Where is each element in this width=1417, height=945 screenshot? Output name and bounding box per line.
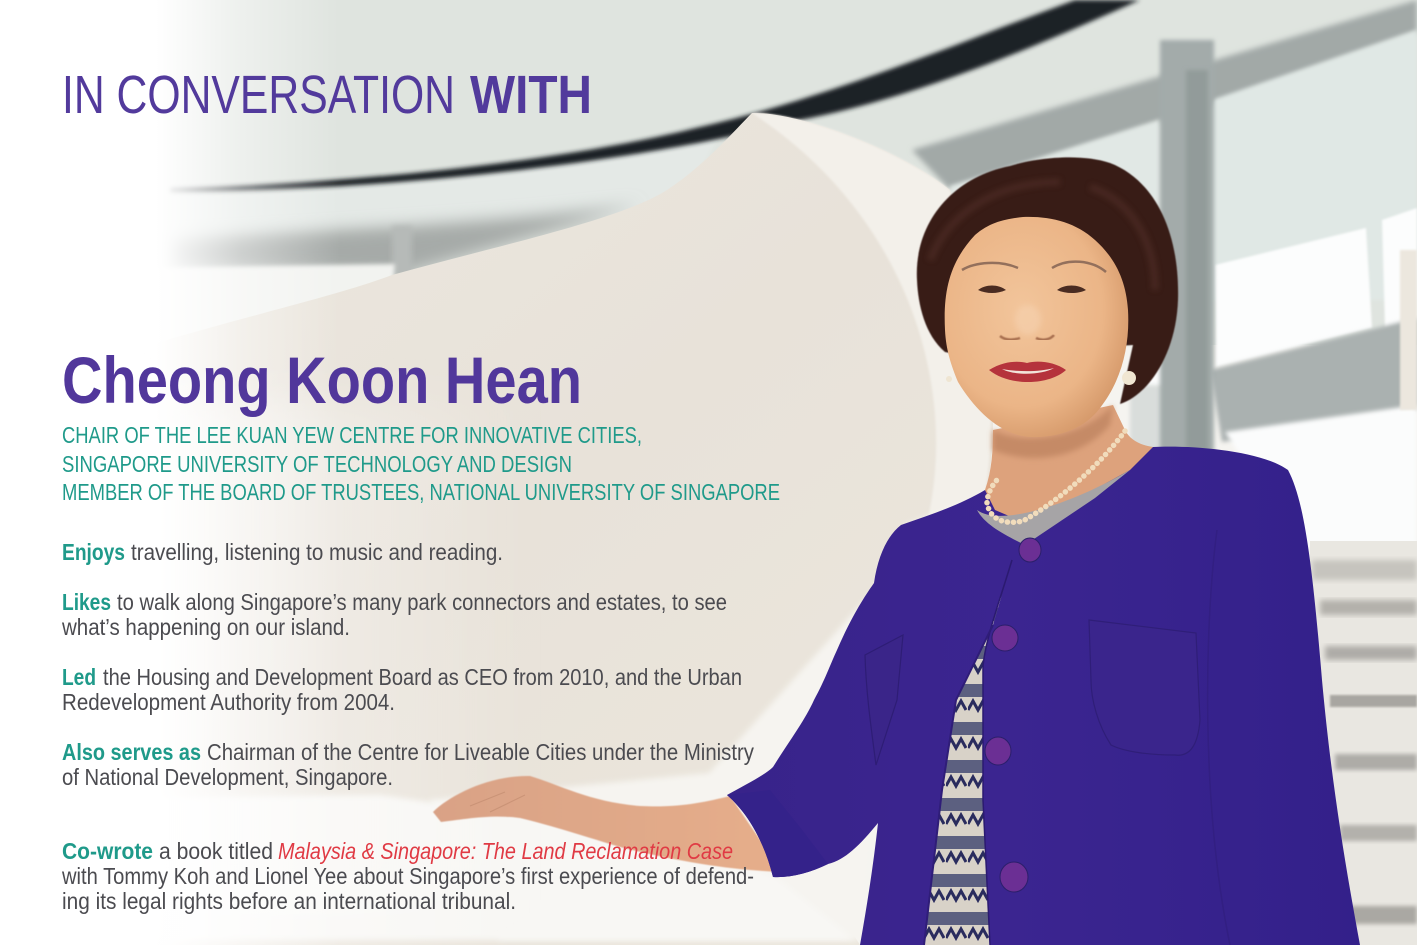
neck (985, 405, 1153, 525)
lower window frame (1210, 318, 1417, 442)
hair (917, 157, 1178, 404)
earrings (1122, 371, 1136, 385)
text block: enjoys: Enjoys (62, 539, 125, 565)
sculptural white staircase (0, 113, 993, 945)
pearl necklace (987, 431, 1125, 522)
text block: also serves as: Chairman of the Centre for Liveable Cities under the Ministry (207, 739, 754, 765)
text block: led: the Housing and Development Board as CEO from 2010, and the Urban (103, 664, 742, 690)
text block: likes: what’s happening on our island. (61, 614, 350, 640)
sleeve pocket (865, 635, 903, 765)
text block: led (62, 664, 742, 715)
front jacket edge (983, 560, 1012, 945)
title: WITH (470, 65, 592, 125)
text block: co-wrote (61, 838, 754, 914)
jacket silhouette (727, 447, 1360, 945)
railing (0, 795, 855, 940)
text block: also serves as: Also serves as (62, 739, 201, 765)
text block: led: Redevelopment Authority from 2004. (62, 689, 395, 715)
nose (1000, 335, 1054, 340)
patterned blouse panel (924, 560, 1012, 945)
forearm and hand (433, 776, 782, 872)
cuff (727, 790, 828, 877)
blouse neckline (977, 470, 1130, 545)
text block: co-wrote: ing its legal rights before an international tribunal. (62, 888, 516, 914)
text block: likes: to walk along Singapore’s many park connectors and estates, to see (117, 589, 727, 615)
black ceiling strip (170, 0, 1140, 192)
text block: likes: Likes (62, 589, 111, 615)
text block: led: Led (62, 664, 96, 690)
window panes (950, 120, 1160, 345)
lighter swoosh under the sculpture (430, 495, 985, 940)
roles: MEMBER OF THE BOARD OF TRUSTEES, NATIONAL UNIVERSITY OF SINGAPORE (62, 479, 780, 505)
text block: likes (61, 589, 727, 640)
jacket pocket (1089, 620, 1200, 755)
steps (1310, 541, 1417, 945)
text block: enjoys: travelling, listening to music and reading. (131, 539, 503, 565)
portrait: Cheong Koon Hean (433, 157, 1360, 945)
jacket buttons (985, 538, 1041, 892)
roles: SINGAPORE UNIVERSITY OF TECHNOLOGY AND DESIGN (62, 451, 572, 477)
text block: also serves as: of National Development, Singapore. (62, 764, 393, 790)
text block: co-wrote: with Tommy Koh and Lionel Yee about Singapore’s first experience of defend- (61, 863, 754, 889)
text block: also serves as (62, 739, 754, 790)
name heading: Cheong Koon Hean (62, 343, 582, 417)
text block: co-wrote: a book titled (159, 838, 273, 864)
eyebrows (962, 263, 1018, 270)
fin highlight (752, 113, 991, 530)
jacket seams (1208, 530, 1230, 945)
text block: co-wrote: Malaysia & Singapore: The Land Reclamation Case (278, 838, 733, 864)
ceiling (0, 0, 1417, 345)
smile lips (989, 362, 1066, 382)
window beam (912, 0, 1417, 190)
eyes (978, 286, 1006, 293)
title: IN CONVERSATION (62, 65, 455, 125)
face (945, 217, 1128, 437)
text block: co-wrote: Co-wrote (62, 838, 153, 864)
roles (62, 422, 780, 505)
grey soffit band (170, 205, 640, 275)
roles: CHAIR OF THE LEE KUAN YEW CENTRE FOR INNOVATIVE CITIES, (62, 422, 642, 448)
